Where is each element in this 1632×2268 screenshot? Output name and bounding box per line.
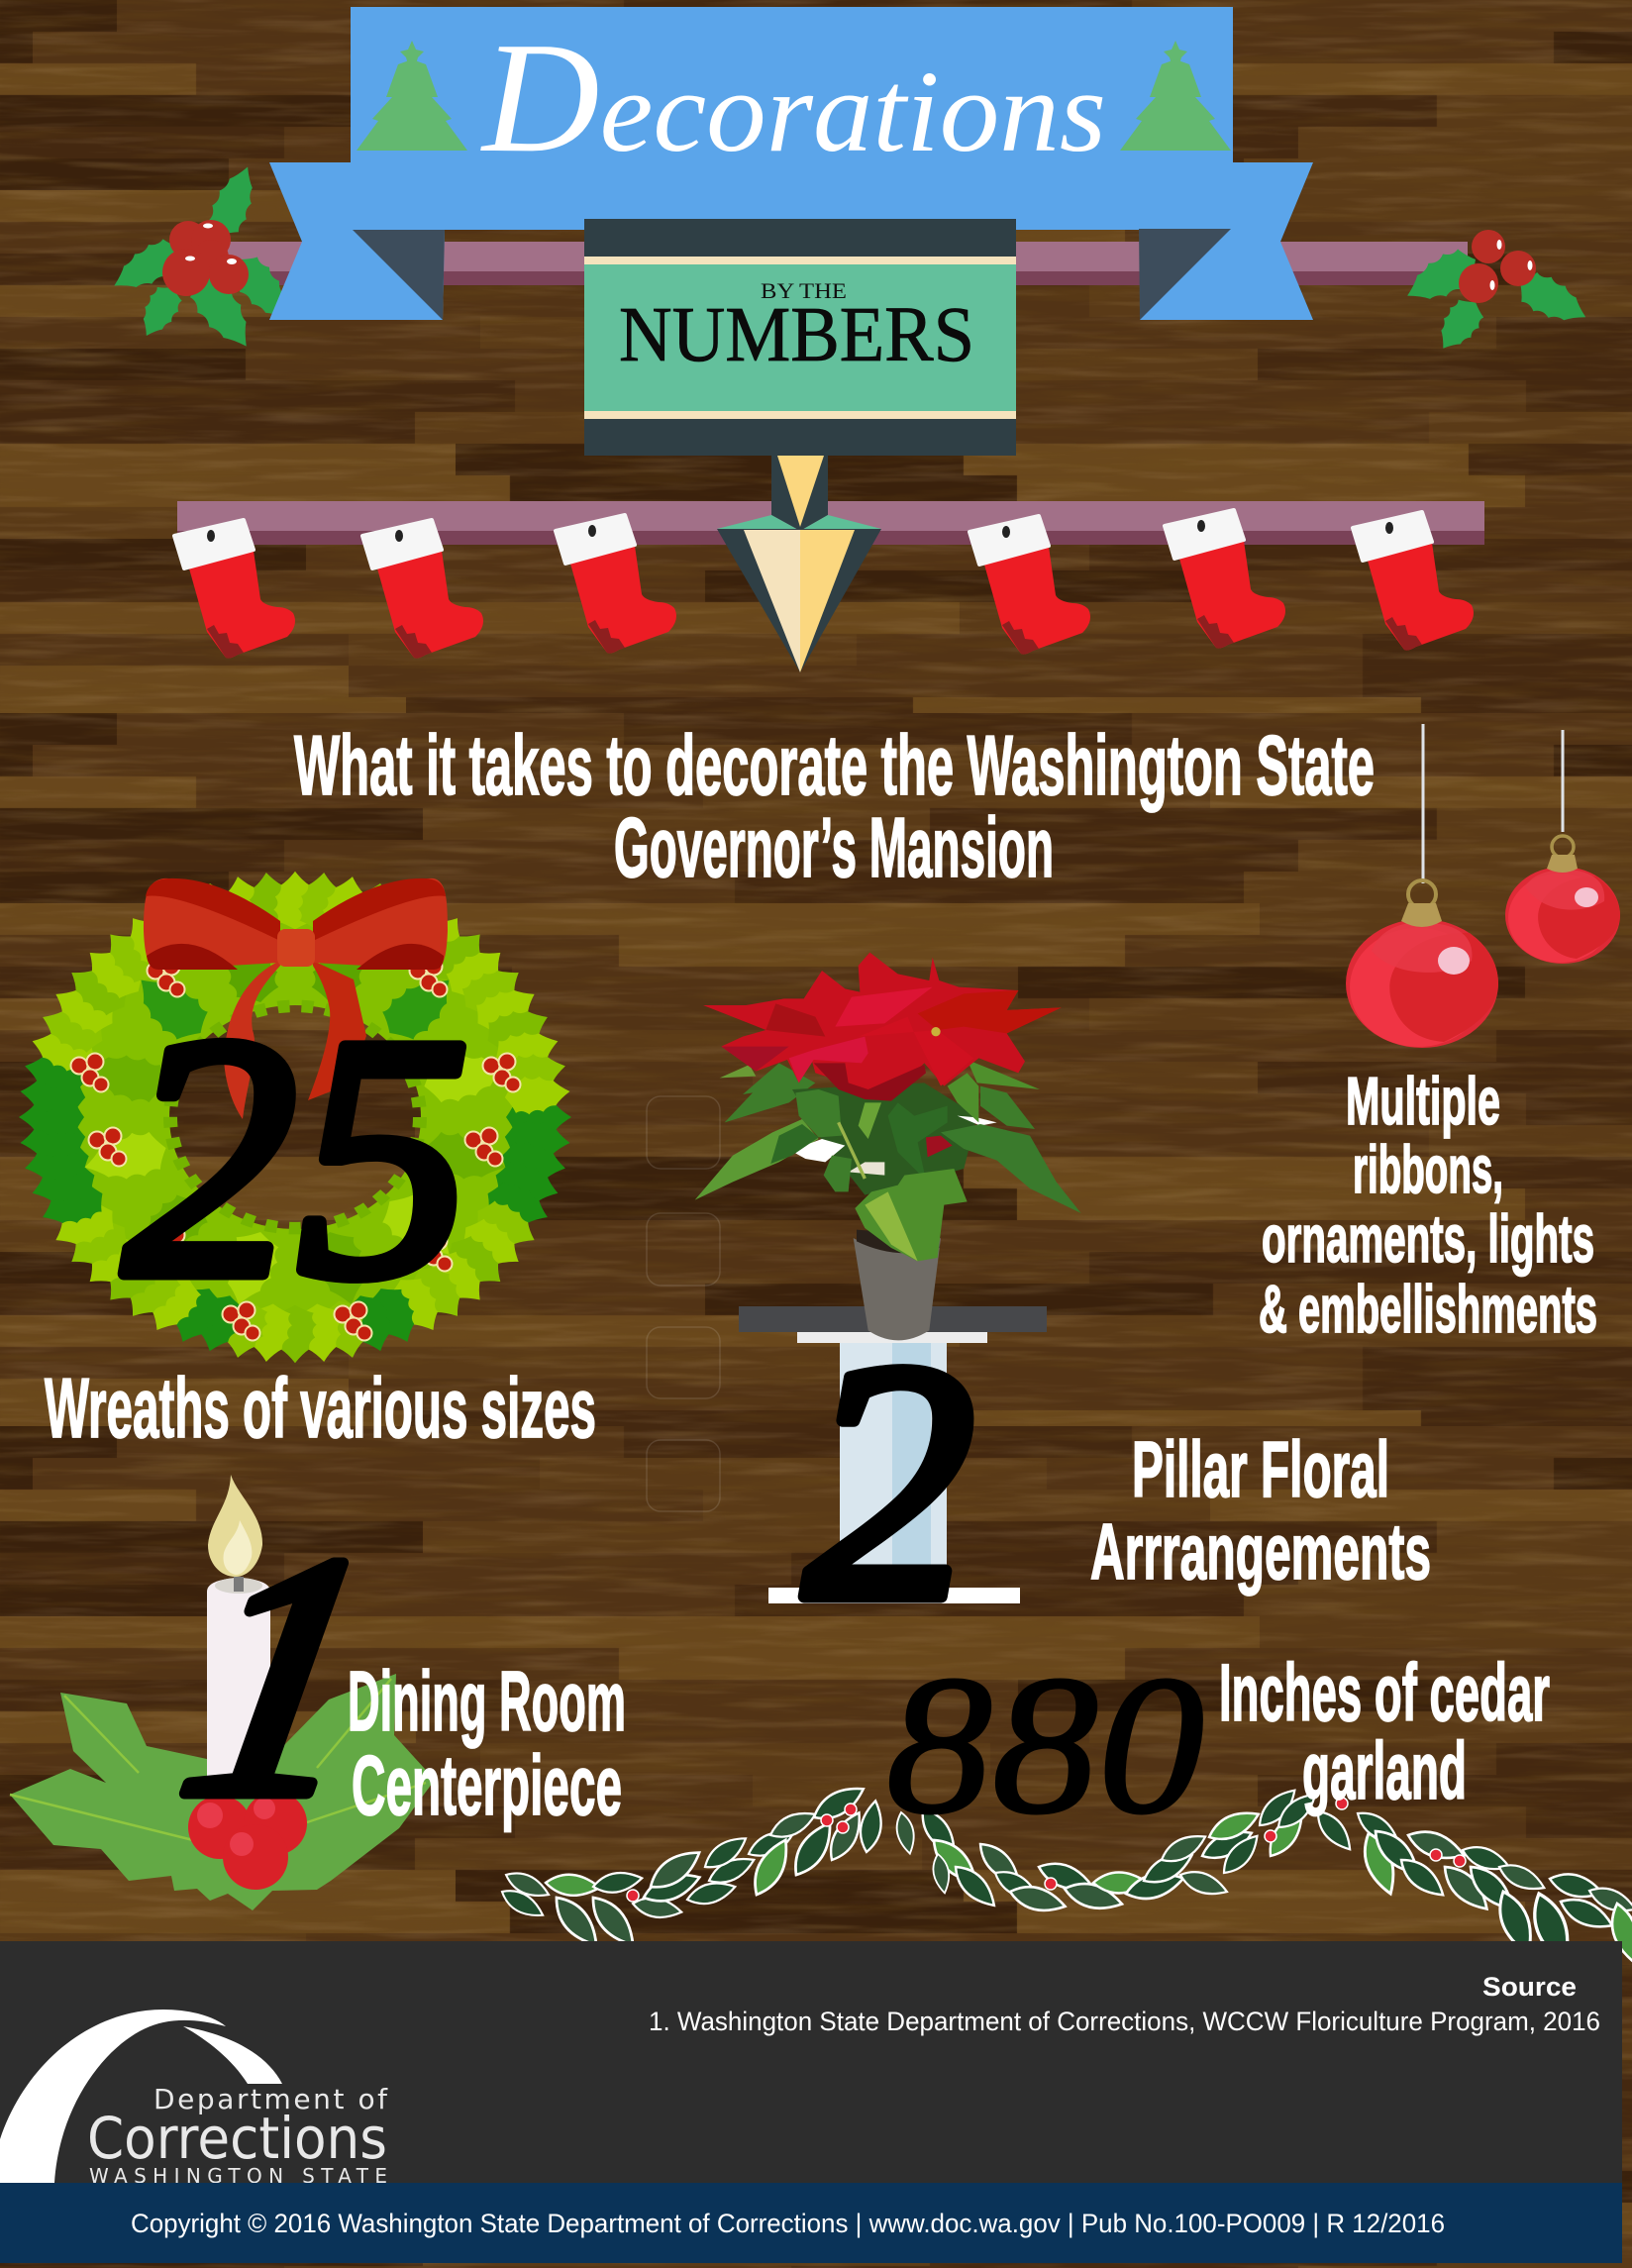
- icon: wreath: [18, 871, 572, 1364]
- title ribbon banner: [269, 7, 1313, 320]
- lower mantel shelf: [177, 501, 1484, 545]
- footer panel: [0, 1941, 1622, 2188]
- red bracts: [703, 953, 1062, 1101]
- subtitle panel: by the numbers: NUMBERS: [619, 292, 974, 378]
- label: inches of cedar garland: [1219, 1648, 1550, 1816]
- icon: left holly sprig: [105, 159, 302, 359]
- copyright bar: [0, 2183, 1622, 2263]
- small ornament: [1505, 730, 1620, 964]
- label: multiple ribbons: ribbons,: [1353, 1132, 1503, 1207]
- pot rim: [857, 1230, 939, 1253]
- upper mantel shelf: [226, 242, 1468, 285]
- icon: ornaments: [1346, 724, 1620, 1048]
- number: 1: 1: [160, 1485, 401, 1868]
- source citation: 1. Washington State Department of Corrections, WCCW Floriculture Program, 2016: [649, 2007, 1600, 2036]
- label: wreaths: Wreaths of various sizes: [45, 1362, 596, 1456]
- faint rounded outlines: [647, 1096, 720, 1511]
- number: 880: 880: [886, 1636, 1204, 1855]
- logo: department of corrections: Department of: [153, 2083, 388, 2115]
- row of stockings: [174, 510, 1474, 659]
- label: pillar floral arrangements: Pillar Floral: [1132, 1425, 1389, 1513]
- number: 2: 2: [804, 1292, 974, 1671]
- icon: poinsettia plant: [695, 953, 1081, 1340]
- icon: tree left: [357, 41, 467, 151]
- copyright bar: Copyright © 2016 Washington State Department of Corrections | www.doc.wa.gov | Pub No.100-PO009 | R 12/2016: [131, 2209, 1445, 2238]
- number: 25: 25: [124, 965, 470, 1349]
- icon: cedar garland: [497, 1780, 1632, 1968]
- banner arrow pointer: [717, 456, 881, 672]
- subtitle panel: by the numbers: [584, 219, 1016, 456]
- icon: tree right: [1120, 41, 1231, 151]
- pot: [854, 1238, 941, 1340]
- heading: Governor’s Mansion: [614, 801, 1054, 895]
- wreath bow: [144, 878, 448, 1119]
- subtitle panel: by the numbers: BY THE: [761, 278, 847, 303]
- icon: pillar table: [739, 1306, 1047, 1603]
- large ornament: [1346, 724, 1498, 1048]
- green leaves: [695, 1060, 1081, 1261]
- label: dining room centerpiece: [348, 1655, 626, 1833]
- label: inches of cedar garland: garland: [1302, 1726, 1467, 1816]
- wreath berries: [71, 959, 521, 1341]
- source heading: Source: [1482, 1972, 1577, 2002]
- icon: right holly sprig: [1398, 230, 1594, 359]
- logo: department of corrections: WASHINGTON STATE: [89, 2164, 387, 2188]
- icon: candle with holly: [10, 1475, 435, 1910]
- label: multiple ribbons: Multiple: [1346, 1064, 1500, 1139]
- label: pillar floral arrangements: [1090, 1425, 1431, 1596]
- logo: department of corrections: Corrections: [87, 2105, 387, 2172]
- label: multiple ribbons: [1259, 1064, 1597, 1347]
- logo: department of corrections: [0, 2010, 388, 2188]
- label: dining room centerpiece: Dining Room: [348, 1655, 626, 1749]
- heading: [294, 719, 1375, 895]
- label: dining room centerpiece: Centerpiece: [352, 1739, 622, 1833]
- title: Decorations: Decorations: [480, 9, 1106, 185]
